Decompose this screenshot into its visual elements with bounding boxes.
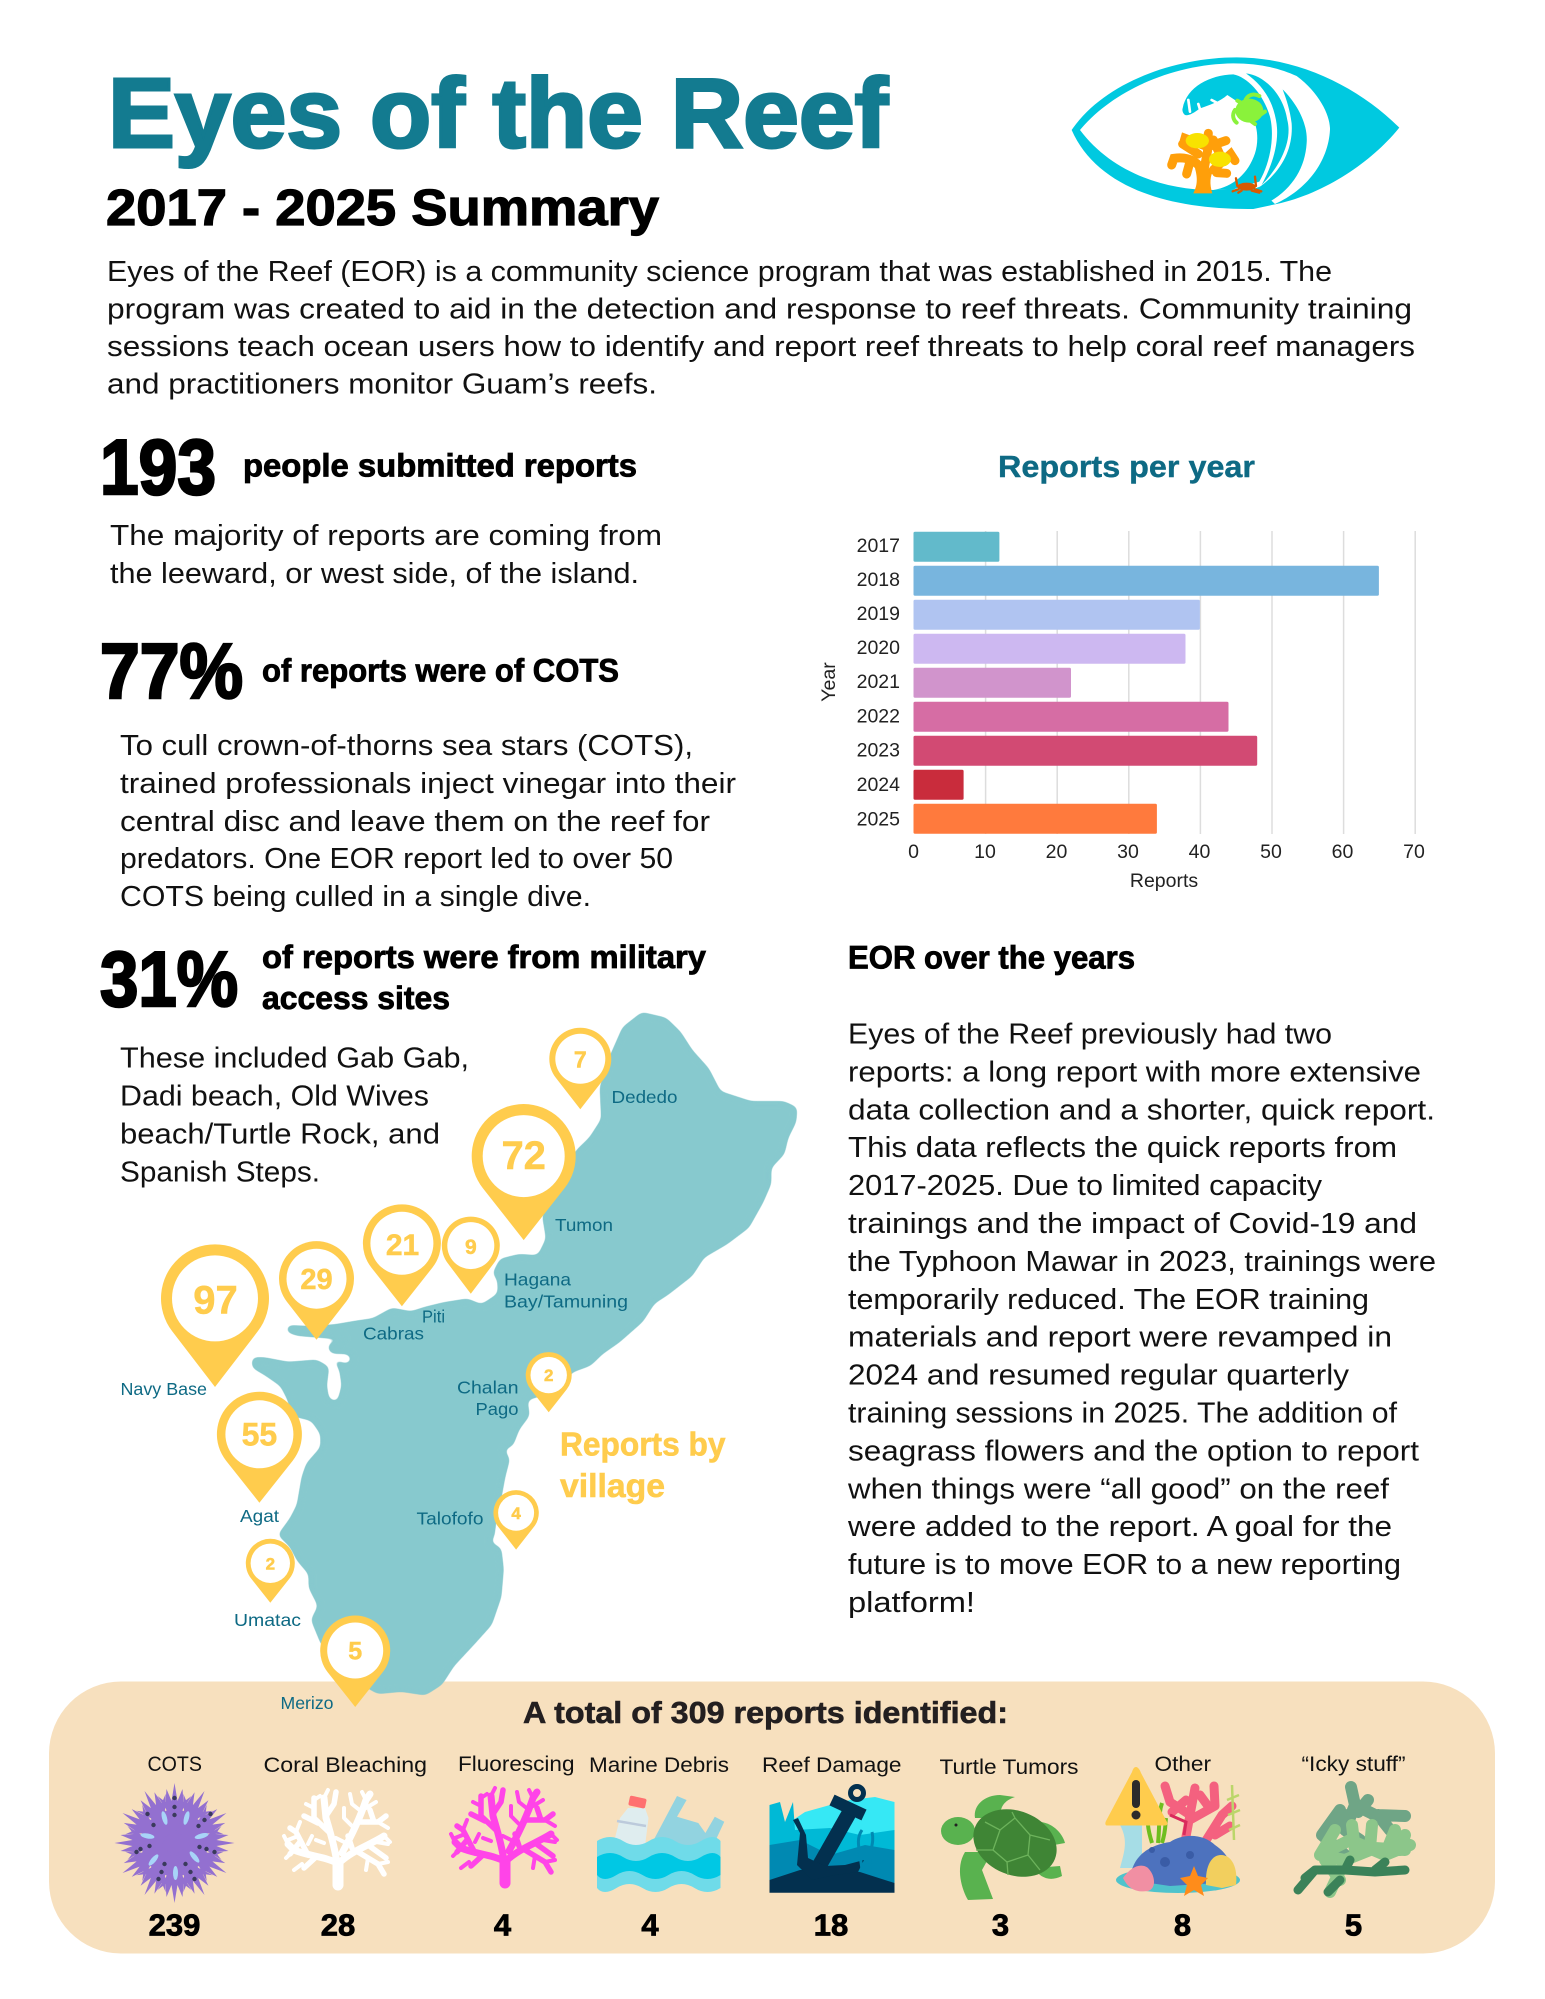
EOR over the years text: 2024 and resumed regular quarterly	[848, 1360, 1350, 1392]
pin: Cabras 29	[279, 1241, 354, 1340]
EOR over the years text: trainings and the impact of Covid-19 and	[848, 1208, 1417, 1240]
village labels: Talofofo	[416, 1508, 484, 1528]
bar chart: reports per year: 2025	[857, 808, 900, 830]
stat: 77% COTS: trained professionals inject vinegar into their	[120, 768, 736, 800]
bar chart: reports per year: 2018	[857, 569, 900, 591]
EOR over the years text: data collection and a shorter, quick report.	[848, 1094, 1435, 1126]
category: Reef Damage: Reef Damage	[762, 1753, 902, 1777]
stat: 31% military: Spanish Steps.	[120, 1156, 320, 1188]
icon: warning and reef scene	[1105, 1767, 1240, 1896]
stat: 31% military: of reports were from military	[262, 939, 706, 975]
category: Turtle Tumors: Turtle Tumors	[940, 1755, 1078, 1779]
category: COTS	[114, 1752, 235, 1942]
EOR over the years text: seagrass flowers and the option to report	[848, 1435, 1419, 1467]
stat: 193 people: people submitted reports	[243, 448, 637, 484]
pin: Tumon 72	[472, 1104, 576, 1240]
pin: Piti 21: 21	[386, 1229, 419, 1262]
category: Icky stuff: 5	[1345, 1908, 1362, 1942]
bar chart: reports per year: 10	[974, 841, 996, 863]
EOR over the years text: reports: a long report with more extensive	[848, 1056, 1421, 1088]
pin: Merizo 5	[320, 1616, 390, 1707]
bar chart: reports per year: 2017	[857, 535, 900, 557]
category: Fluorescing: Fluorescing	[458, 1752, 574, 1776]
pin: Navy Base 97	[161, 1244, 269, 1387]
pin: Hagana Bay 9	[442, 1217, 500, 1294]
village labels: Pago	[476, 1399, 518, 1419]
EOR over the years text: platform!	[848, 1587, 975, 1619]
icon: green algae	[1298, 1787, 1410, 1892]
bar chart: reports per year: Reports	[1130, 870, 1198, 892]
pin: Talofofo 4: 4	[511, 1504, 521, 1523]
EOR over the years text: materials and report were revamped in	[848, 1322, 1392, 1354]
bar chart: reports per year: Year	[818, 662, 840, 702]
map title: Reports by	[560, 1426, 726, 1462]
category: Coral Bleaching: Coral Bleaching	[264, 1753, 427, 1777]
subtitle: 2017 - 2025 Summary	[106, 179, 660, 236]
village labels	[120, 1087, 678, 1713]
stat: 77% COTS: of reports were of COTS	[262, 652, 619, 688]
stat: 31% military	[100, 935, 706, 1188]
bar chart: reports per year: 2022	[857, 706, 900, 728]
category: Reef Damage: 18	[814, 1908, 848, 1942]
stat: 77% COTS: COTS being culled in a single dive.	[120, 881, 591, 913]
category: COTS: 239	[149, 1908, 200, 1942]
intro paragraph: Eyes of the Reef (EOR) is a community science program that was established in 2015. The	[107, 256, 1332, 288]
village labels: Cabras	[363, 1324, 424, 1344]
intro paragraph: program was created to aid in the detection and response to reef threats. Community training	[107, 294, 1412, 326]
category: Icky stuff: “Icky stuff”	[1302, 1752, 1406, 1776]
bar chart: reports per year: 50	[1260, 841, 1282, 863]
bar chart: reports per year: 20	[1046, 841, 1067, 863]
stat: 77% COTS: 77%	[100, 627, 243, 715]
pin: Umatac 2: 2	[266, 1554, 275, 1573]
pin: Tumon 72: 72	[501, 1134, 546, 1178]
category: Reef Damage	[762, 1753, 902, 1942]
village labels: Navy Base	[120, 1379, 207, 1399]
stat: 77% COTS	[100, 627, 736, 913]
intro paragraph: and practitioners monitor Guam’s reefs.	[107, 368, 657, 400]
bar chart: reports per year: 30	[1117, 841, 1139, 863]
EOR over the years text: EOR over the years	[848, 940, 1135, 976]
pin: Dededo 7	[549, 1028, 611, 1109]
category: Other: 8	[1174, 1908, 1191, 1942]
pin: Umatac 2	[246, 1539, 295, 1603]
pin: Dededo 7: 7	[574, 1046, 587, 1072]
EOR over the years text: This data reflects the quick reports from	[848, 1132, 1397, 1164]
map title	[560, 1426, 726, 1504]
category: Fluorescing: 4	[494, 1908, 512, 1942]
bar chart: reports per year: 0	[908, 841, 919, 863]
icon: anchor on reef	[770, 1786, 894, 1893]
panel: total reports identified	[49, 1682, 1495, 1954]
village labels: Piti	[422, 1306, 445, 1326]
category: Fluorescing	[451, 1752, 574, 1942]
category: Other: Other	[1154, 1752, 1211, 1776]
category: Turtle Tumors: 3	[992, 1908, 1009, 1942]
map: Guam reports by village	[120, 1013, 796, 1713]
bar chart: reports per year: 2023	[857, 740, 900, 762]
EOR over the years text	[847, 940, 1436, 1619]
pin: Navy Base 97: 97	[193, 1279, 238, 1323]
pin: Talofofo 4	[493, 1490, 539, 1550]
category: Turtle Tumors	[940, 1755, 1078, 1942]
EOR over the years text: training sessions in 2025. The addition of	[848, 1398, 1398, 1430]
bar chart: reports per year: 2021	[857, 671, 900, 693]
chart title: Reports per year	[998, 449, 1255, 484]
icon: green turtle	[941, 1795, 1067, 1900]
icon: crown-of-thorns star	[114, 1783, 235, 1903]
stat: 77% COTS: predators. One EOR report led to over 50	[120, 843, 673, 875]
EOR over the years text: were added to the report. A goal for the	[847, 1511, 1392, 1543]
intro paragraph: sessions teach ocean users how to identify and report reef threats to help coral reef managers	[107, 331, 1415, 363]
panel heading: A total of 309 reports identified:	[523, 1695, 1008, 1730]
category: Marine Debris	[589, 1753, 729, 1942]
category: Coral Bleaching: 28	[321, 1908, 355, 1942]
bar chart: reports per year: 60	[1332, 841, 1353, 863]
village labels: Tumon	[555, 1215, 613, 1235]
bar chart: reports per year: 40	[1189, 841, 1210, 863]
village labels: Hagana	[504, 1270, 571, 1290]
pin: Agat 55: 55	[242, 1416, 277, 1452]
island outline	[253, 1013, 796, 1695]
stat: 31% military: beach/Turtle Rock, and	[120, 1118, 440, 1150]
stat: 77% COTS: central disc and leave them on the reef for	[120, 806, 710, 838]
stat: 193 people	[100, 423, 662, 590]
bar chart: reports per year: 2024	[857, 774, 900, 796]
category: Marine Debris: Marine Debris	[589, 1753, 729, 1777]
village labels: Bay/Tamuning	[504, 1292, 628, 1312]
village labels: Merizo	[280, 1693, 334, 1713]
village labels: Umatac	[234, 1610, 301, 1630]
pin: Chalan Pago 2: 2	[544, 1366, 553, 1385]
stat: 31% military: access sites	[262, 980, 450, 1016]
EOR over the years text: 2017-2025. Due to limited capacity	[848, 1170, 1323, 1202]
EOR over the years text: temporarily reduced. The EOR training	[848, 1284, 1369, 1316]
EOR over the years text: Eyes of the Reef previously had two	[848, 1018, 1332, 1050]
village labels: Chalan	[457, 1378, 518, 1398]
stat: 193 people: 193	[100, 423, 216, 511]
stat: 31% military: 31%	[100, 935, 238, 1023]
stat: 77% COTS: To cull crown-of-thorns sea stars (COTS),	[120, 730, 693, 762]
pin: Chalan Pago 2	[526, 1352, 572, 1412]
pin: Piti 21	[363, 1204, 441, 1306]
bar chart: reports per year: 2020	[857, 637, 900, 659]
category: Icky stuff	[1298, 1752, 1410, 1942]
pin: Merizo 5: 5	[348, 1638, 362, 1666]
icon: pink coral	[451, 1788, 557, 1883]
pin: Cabras 29: 29	[300, 1264, 333, 1296]
stat: 193 people: The majority of reports are coming from	[110, 520, 662, 552]
category: Coral Bleaching	[264, 1753, 427, 1942]
stat: 31% military: These included Gab Gab,	[120, 1042, 469, 1074]
stat: 31% military: Dadi beach, Old Wives	[120, 1080, 429, 1112]
bar chart: reports per year: 70	[1403, 841, 1425, 863]
stat: 193 people: the leeward, or west side, of the island.	[110, 558, 639, 590]
icon: white coral	[284, 1790, 390, 1885]
EOR over the years text: future is to move EOR to a new reporting	[848, 1549, 1401, 1581]
category: Other	[1105, 1752, 1240, 1942]
logo: eye with wave	[1072, 57, 1399, 209]
category: Marine Debris: 4	[641, 1908, 659, 1942]
title: Eyes of the Reef	[108, 58, 888, 168]
pin: Agat 55	[217, 1392, 302, 1503]
map title: village	[560, 1467, 665, 1504]
icon: debris in water	[597, 1795, 724, 1892]
bar chart: reports per year	[818, 531, 1425, 892]
village labels: Dededo	[612, 1087, 678, 1107]
pin: Hagana Bay 9: 9	[465, 1236, 477, 1259]
EOR over the years text: the Typhoon Mawar in 2023, trainings were	[848, 1246, 1436, 1278]
category: COTS: COTS	[148, 1752, 202, 1776]
bar chart: reports per year: 2019	[857, 603, 900, 625]
EOR over the years text: when things were “all good” on the reef	[847, 1473, 1390, 1505]
intro paragraph	[107, 256, 1415, 400]
village labels: Agat	[240, 1506, 279, 1526]
